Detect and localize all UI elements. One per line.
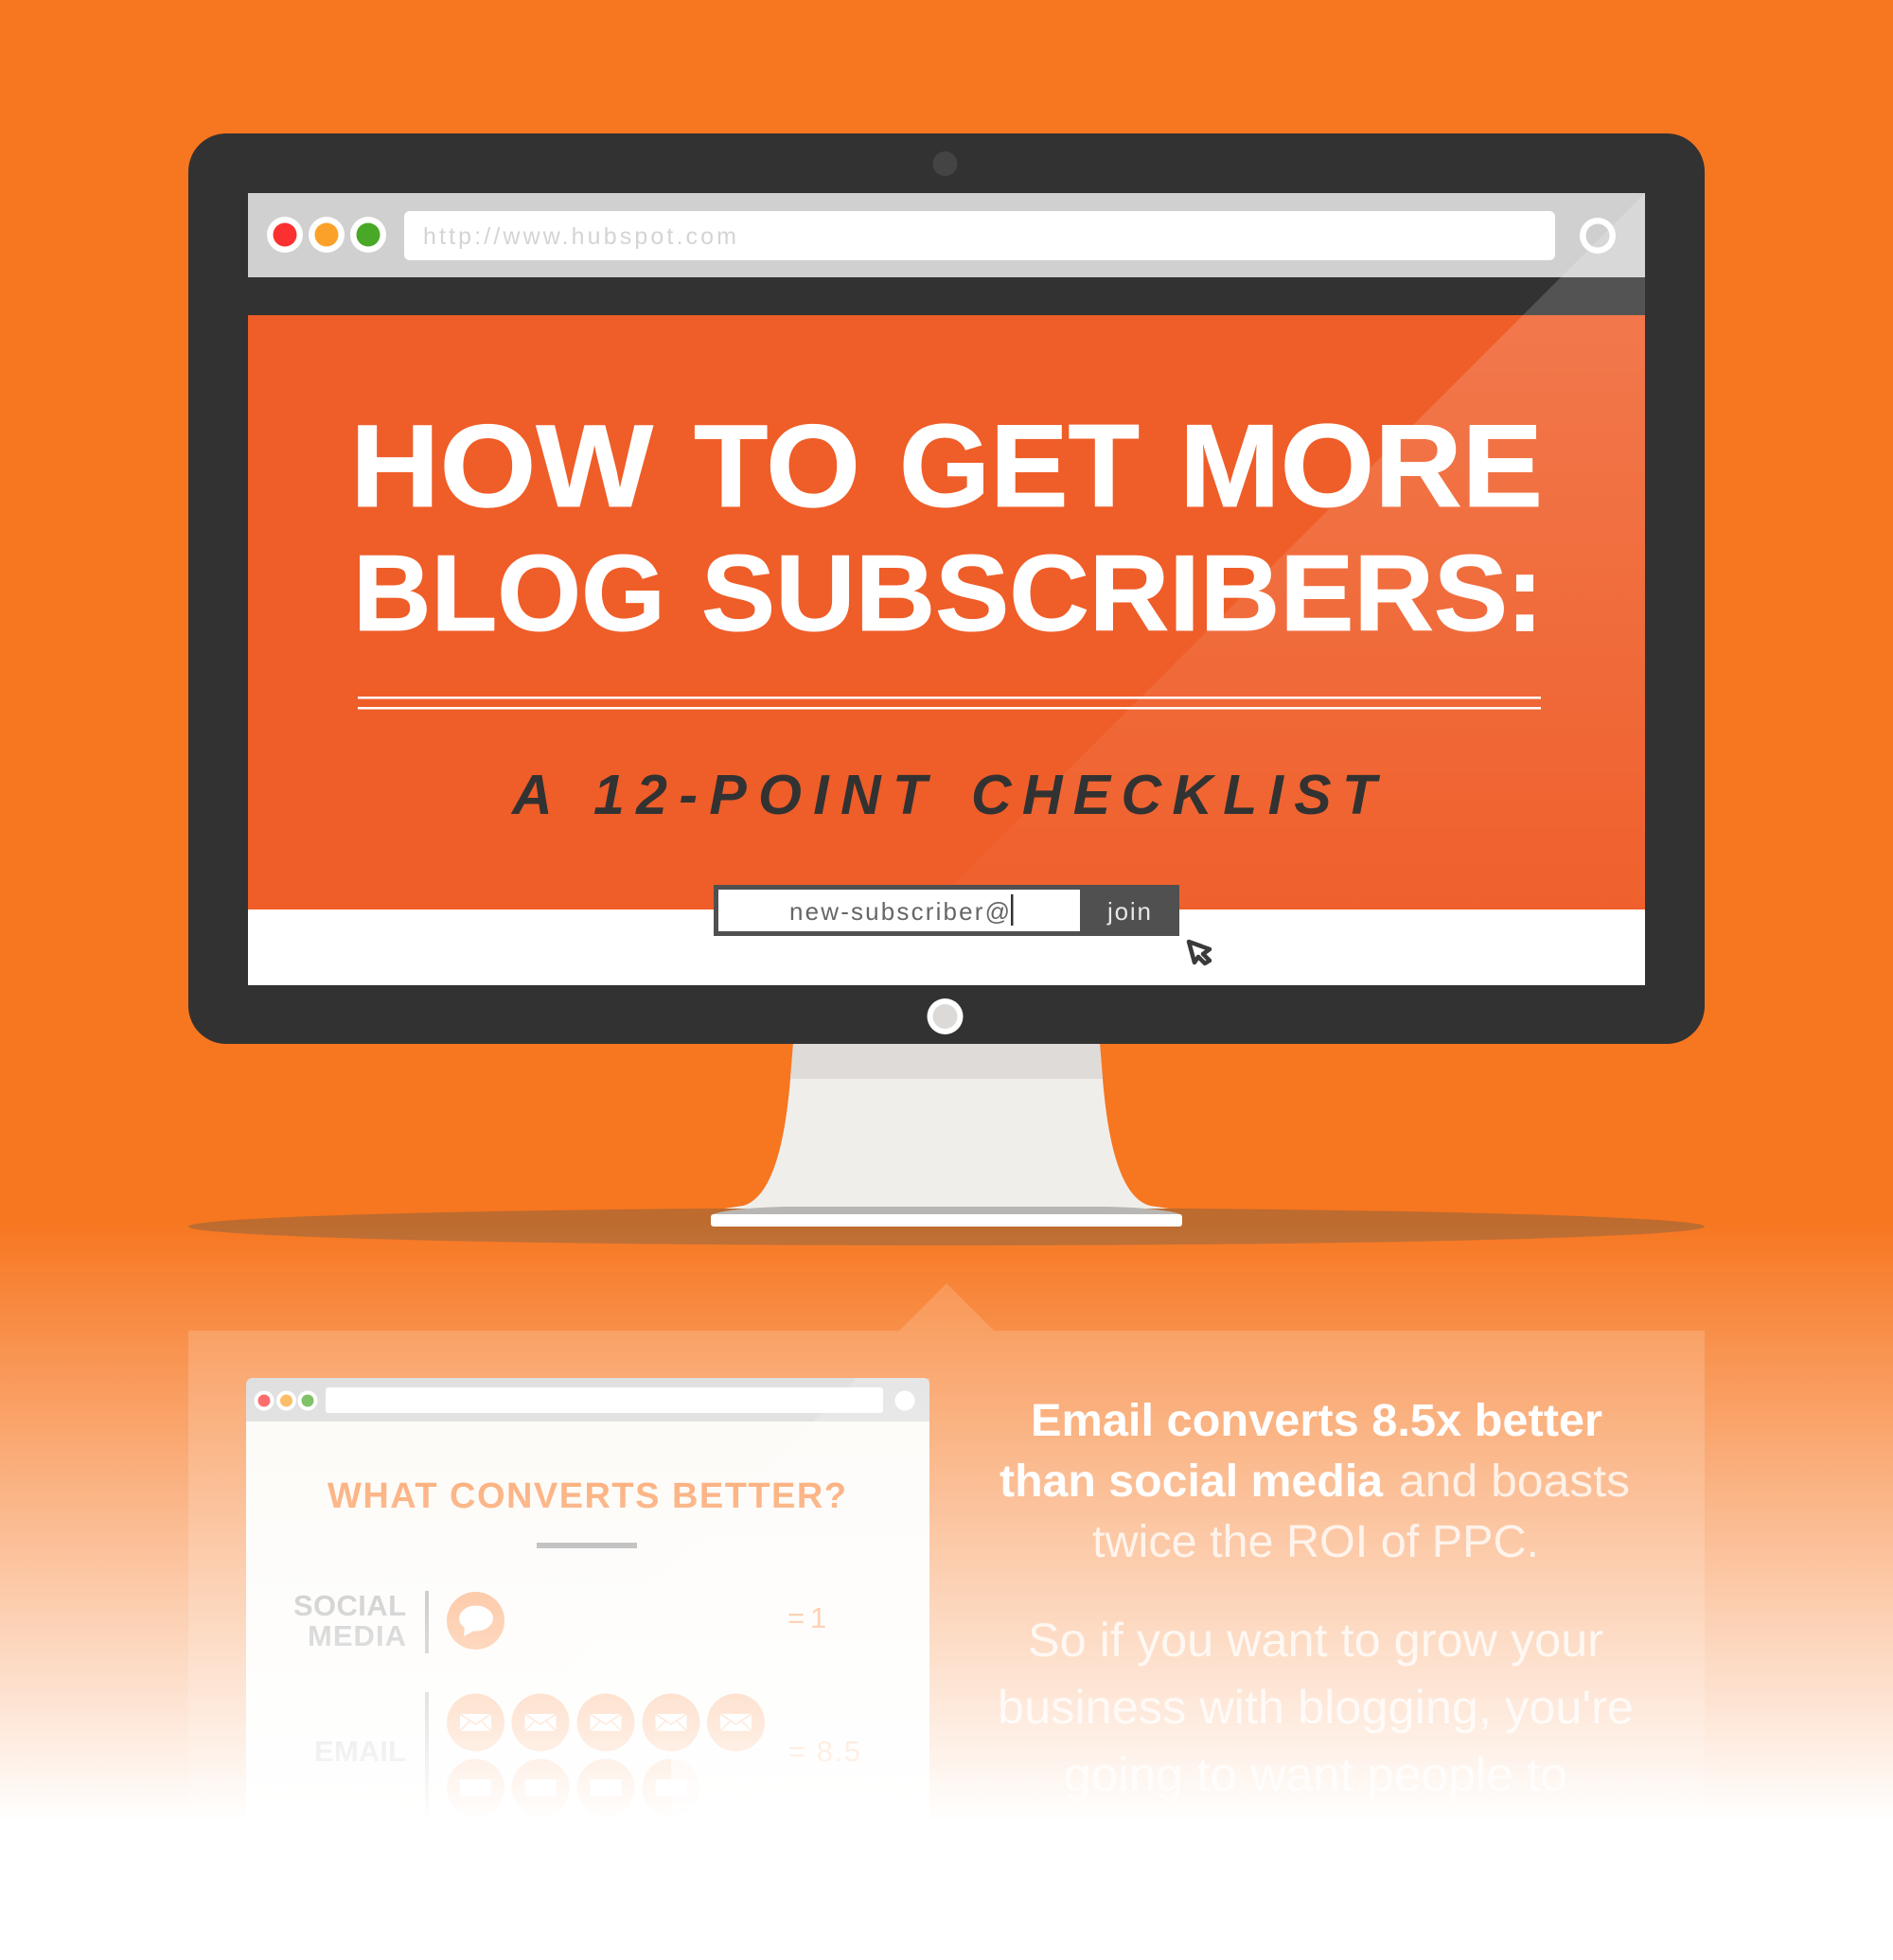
title bbox=[350, 401, 1543, 654]
lower panel bbox=[188, 1283, 1705, 1827]
signup form bbox=[714, 885, 1179, 936]
axis bar bbox=[425, 1591, 429, 1653]
social media label: MEDIA bbox=[308, 1619, 406, 1652]
text block: call to action: going to want people to bbox=[1064, 1748, 1567, 1801]
screen glare bbox=[929, 193, 1645, 909]
row: email bbox=[314, 1692, 860, 1817]
monitor shadow bbox=[188, 1208, 1705, 1245]
refresh button bbox=[1580, 218, 1616, 254]
title: GET bbox=[899, 401, 1140, 532]
subtitle: A bbox=[510, 764, 553, 826]
browser window: what converts better bbox=[246, 1378, 929, 1827]
window button bbox=[895, 1391, 914, 1410]
icon: chat bubble bbox=[447, 1592, 504, 1650]
text block: email stat: and boasts bbox=[1399, 1457, 1630, 1507]
social media label bbox=[293, 1589, 406, 1652]
address bar bbox=[404, 211, 1555, 260]
join button label: join bbox=[1106, 897, 1151, 926]
title: BLOG bbox=[353, 534, 665, 654]
window glare bbox=[408, 1378, 929, 1827]
title: HOW bbox=[350, 401, 653, 532]
screen content bbox=[248, 315, 1645, 909]
subtitle: 12-POINT bbox=[593, 764, 931, 826]
double rule bbox=[358, 697, 1541, 710]
text block: email stat bbox=[1000, 1396, 1630, 1567]
screen footer bbox=[248, 909, 1645, 985]
browser toolbar bbox=[248, 193, 1645, 277]
text block: email stat: than social media bbox=[1000, 1457, 1383, 1507]
social value: = bbox=[787, 1601, 805, 1634]
email label: EMAIL bbox=[314, 1735, 406, 1768]
monitor stand bbox=[711, 1044, 1182, 1227]
social media label: SOCIAL bbox=[293, 1589, 406, 1622]
title: MORE bbox=[1179, 401, 1543, 532]
caret bbox=[1011, 894, 1013, 926]
panel background with pointer bbox=[188, 1283, 1705, 1827]
title: : bbox=[1507, 534, 1543, 654]
url text: http://www.hubspot.com bbox=[423, 223, 736, 250]
email icons row 1 bbox=[447, 1694, 765, 1751]
icon: cursor bbox=[1189, 942, 1210, 963]
window address bar bbox=[326, 1387, 883, 1413]
title: TO bbox=[694, 401, 860, 532]
axis bar bbox=[425, 1692, 429, 1815]
heading rule bbox=[537, 1543, 637, 1548]
window body bbox=[246, 1378, 929, 1827]
window toolbar bbox=[246, 1378, 929, 1421]
title: SUBSCRIBERS bbox=[701, 534, 1508, 654]
text block: call to action: business with blogging, you're bbox=[998, 1681, 1634, 1734]
white fade overlay bbox=[0, 1221, 1893, 1960]
monitor bbox=[188, 133, 1705, 1245]
text block: email stat: twice the ROI of PPC. bbox=[1092, 1517, 1539, 1567]
home button bbox=[928, 998, 964, 1034]
email input text: new-subscriber@ bbox=[789, 897, 1010, 926]
row: social media bbox=[293, 1589, 826, 1653]
text block: call to action bbox=[998, 1614, 1634, 1801]
subtitle bbox=[510, 764, 1381, 826]
camera bbox=[933, 151, 958, 176]
window heading: WHAT CONVERTS BETTER? bbox=[327, 1476, 846, 1516]
traffic lights bbox=[267, 217, 386, 253]
monitor bezel bbox=[188, 133, 1705, 1044]
subtitle: CHECKLIST bbox=[971, 764, 1381, 826]
text block: email stat: Email converts 8.5x better bbox=[1031, 1396, 1602, 1446]
text block: call to action: So if you want to grow your bbox=[1028, 1614, 1603, 1667]
email icons row 2 bbox=[447, 1758, 700, 1817]
email value: = 8.5 bbox=[788, 1735, 860, 1768]
social value: 1 bbox=[810, 1601, 826, 1634]
window traffic lights bbox=[254, 1391, 318, 1410]
